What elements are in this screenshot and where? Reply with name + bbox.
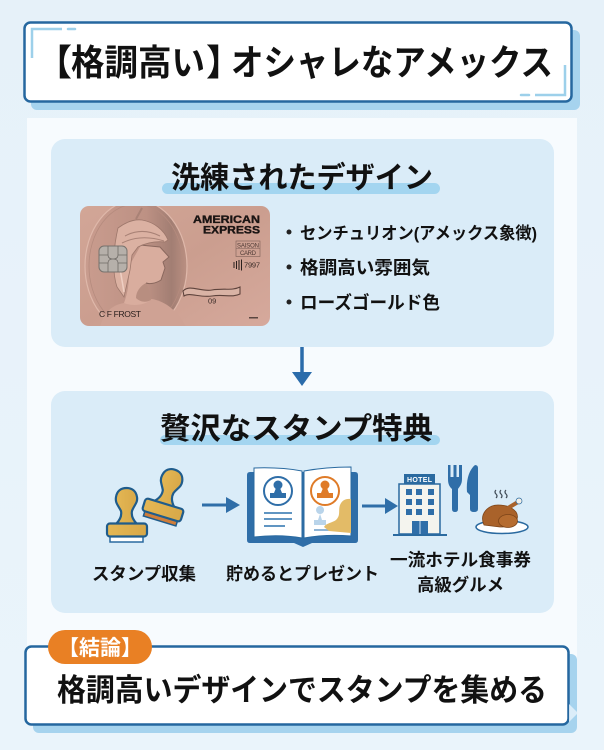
panel: design — [51, 139, 554, 347]
arrow: book to rewards — [362, 498, 398, 514]
card brand — [193, 214, 260, 236]
heading highlight — [160, 435, 440, 445]
title box — [24, 22, 580, 110]
arrow: down — [292, 347, 312, 386]
title text — [36, 42, 553, 83]
panel: stamp benefits — [51, 391, 554, 613]
label: save and gift: 貯めるとプレゼント — [226, 564, 379, 584]
arrow: stamps to book — [202, 497, 240, 513]
conclusion tag — [48, 630, 152, 664]
conclusion tag: 【結論】 — [58, 637, 142, 660]
icon: stamp book — [247, 467, 358, 547]
label: stamp collection: スタンプ収集 — [92, 564, 196, 584]
feature list: 格調高い雰囲気 — [300, 257, 430, 278]
conclusion text: 格調高いデザインでスタンプを集める — [57, 673, 547, 708]
blue stamp mark — [264, 477, 292, 505]
card saison logo: SAISON — [237, 244, 259, 250]
card name: C F FROST — [99, 309, 141, 319]
icon: cutlery — [448, 465, 478, 512]
card brand: AMERICAN — [193, 214, 260, 226]
card chip — [99, 246, 127, 272]
card number: 7997 — [244, 260, 260, 270]
feature list: センチュリオン(アメックス象徴) — [300, 223, 537, 243]
heading: stamps: 贅沢なスタンプ特典 — [160, 413, 433, 446]
feature list — [286, 223, 537, 313]
gold stamp overlay — [324, 499, 351, 533]
title text: 格調高い — [71, 42, 205, 83]
title text: 】 — [206, 42, 242, 83]
card banner — [183, 287, 240, 296]
heading highlight — [162, 183, 440, 194]
conclusion box — [26, 630, 578, 733]
label: hotel dining voucher: 高級グルメ — [417, 575, 504, 595]
label: hotel dining voucher — [390, 550, 532, 595]
card date: 09 — [208, 296, 216, 306]
contactless — [234, 260, 242, 270]
title text: オシャレなアメックス — [231, 42, 553, 83]
content background panel — [27, 118, 577, 663]
card saison logo — [236, 241, 260, 257]
feature list: ローズゴールド色 — [300, 292, 440, 313]
faded stamp mark — [314, 506, 326, 525]
orange stamp mark — [311, 477, 339, 505]
card saison logo: CARD — [240, 251, 257, 257]
icon: roast chicken — [476, 490, 528, 534]
card brand: EXPRESS — [203, 224, 260, 236]
heading: design: 洗練されたデザイン — [171, 161, 433, 195]
label: hotel dining voucher: 一流ホテル食事券 — [390, 550, 532, 570]
title text: 【 — [36, 42, 72, 83]
card portrait — [84, 206, 188, 318]
icon: hotel — [393, 474, 447, 535]
icon: stamps — [107, 464, 194, 542]
icon: hotel: HOTEL — [407, 477, 433, 484]
credit card — [80, 200, 270, 332]
